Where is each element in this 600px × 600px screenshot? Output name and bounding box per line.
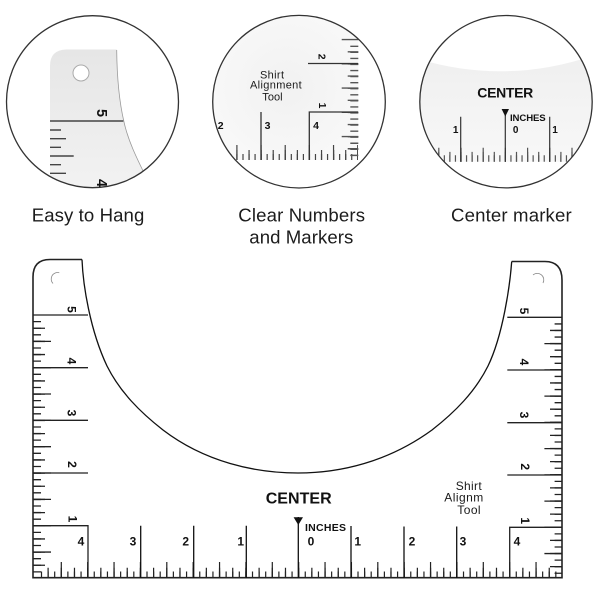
neck curve: [82, 260, 512, 473]
left vertical scale ticks: [37, 321, 42, 575]
bottom numbers: 4: [78, 535, 85, 549]
horizontal scale ticks: [212, 152, 358, 157]
bottom numbers: 2: [182, 535, 189, 549]
bottom numbers: 0: [308, 535, 315, 549]
inches word: INCHES: [510, 113, 546, 124]
number 0: 0: [513, 125, 519, 136]
caption: clear numbers and markers: and Markers: [249, 226, 353, 247]
bottom numbers: 1: [237, 535, 244, 549]
five inch line: [50, 120, 123, 122]
bottom numbers: 2: [409, 535, 416, 549]
right rotated numbers: 1: [518, 517, 532, 524]
circle outline: [6, 16, 178, 188]
right inch lines: [507, 317, 562, 578]
right rotated numbers: 3: [517, 412, 531, 419]
center word: CENTER: [266, 490, 332, 507]
bottom numbers: 1: [354, 535, 361, 549]
inch lines: [461, 112, 550, 162]
right vertical scale ticks: [553, 323, 558, 575]
tool name: Tool: [262, 92, 283, 104]
inches word: INCHES: [305, 522, 346, 534]
hanging hole: [73, 65, 89, 81]
left inch lines: [33, 315, 88, 578]
ruler outline: [33, 260, 562, 578]
circle outline: [213, 15, 385, 188]
right hanging hole: [533, 273, 544, 283]
rotated number 2: 2: [316, 54, 328, 60]
bottom numbers: 3: [130, 535, 137, 549]
tool corner piece: [50, 50, 142, 187]
center word: CENTER: [477, 84, 533, 100]
circle outline: [420, 16, 592, 188]
left rotated numbers: 4: [65, 358, 79, 365]
caption: easy to hang: Easy to Hang: [32, 205, 144, 226]
bottom scale ticks: [41, 570, 556, 575]
tool surface: [420, 60, 592, 150]
number 4: 4: [313, 120, 319, 132]
vertical scale ticks: [350, 39, 354, 160]
right number 1: 1: [552, 125, 558, 136]
left rotated numbers: 3: [65, 410, 79, 417]
tool name: [250, 70, 302, 100]
panel: center marker circle: [415, 16, 595, 188]
left rotated numbers: 1: [66, 516, 80, 523]
panel: clear numbers circle: [212, 14, 386, 189]
number 4: 4: [93, 179, 109, 187]
tool name: Shirt: [260, 70, 284, 82]
curved edge: [116, 50, 144, 171]
bottom numbers: 2: [218, 120, 224, 132]
center triangle: [502, 109, 509, 116]
caption: clear numbers and markers: [238, 205, 365, 247]
left rotated numbers: [65, 306, 80, 523]
tool name: Shirt: [456, 479, 482, 493]
tool name: Tool: [457, 503, 481, 517]
caption: clear numbers and markers: Clear Numbers: [238, 205, 365, 226]
left hanging hole: [51, 272, 59, 284]
bottom inch lines: [141, 517, 457, 578]
right rotated numbers: 2: [518, 463, 532, 470]
ruler ticks: [50, 130, 74, 173]
left rotated numbers: 2: [65, 461, 79, 468]
tool name: Alignm: [444, 491, 483, 505]
tool surface: [221, 22, 352, 154]
tool name: Alignment: [250, 80, 302, 92]
bottom numbers: 4: [514, 535, 521, 549]
number 3: 3: [265, 120, 271, 132]
right rotated numbers: [517, 308, 532, 524]
bottom numbers: [78, 535, 521, 549]
inch lines: [261, 64, 358, 160]
left rotated numbers: 5: [65, 306, 79, 313]
panel: t-shirt alignment ruler tool: [33, 260, 562, 578]
tool name: [444, 479, 483, 517]
right rotated numbers: 5: [517, 308, 531, 315]
right rotated numbers: 4: [517, 359, 531, 366]
rotated number 1: 1: [316, 103, 328, 109]
scale ticks: [416, 155, 594, 158]
center triangle: [294, 517, 303, 525]
left number 1: 1: [453, 125, 459, 136]
caption: center marker: Center marker: [451, 205, 572, 226]
number 5: 5: [93, 109, 109, 117]
bottom numbers: 3: [460, 535, 467, 549]
panel: easy to hang circle: [6, 16, 178, 200]
